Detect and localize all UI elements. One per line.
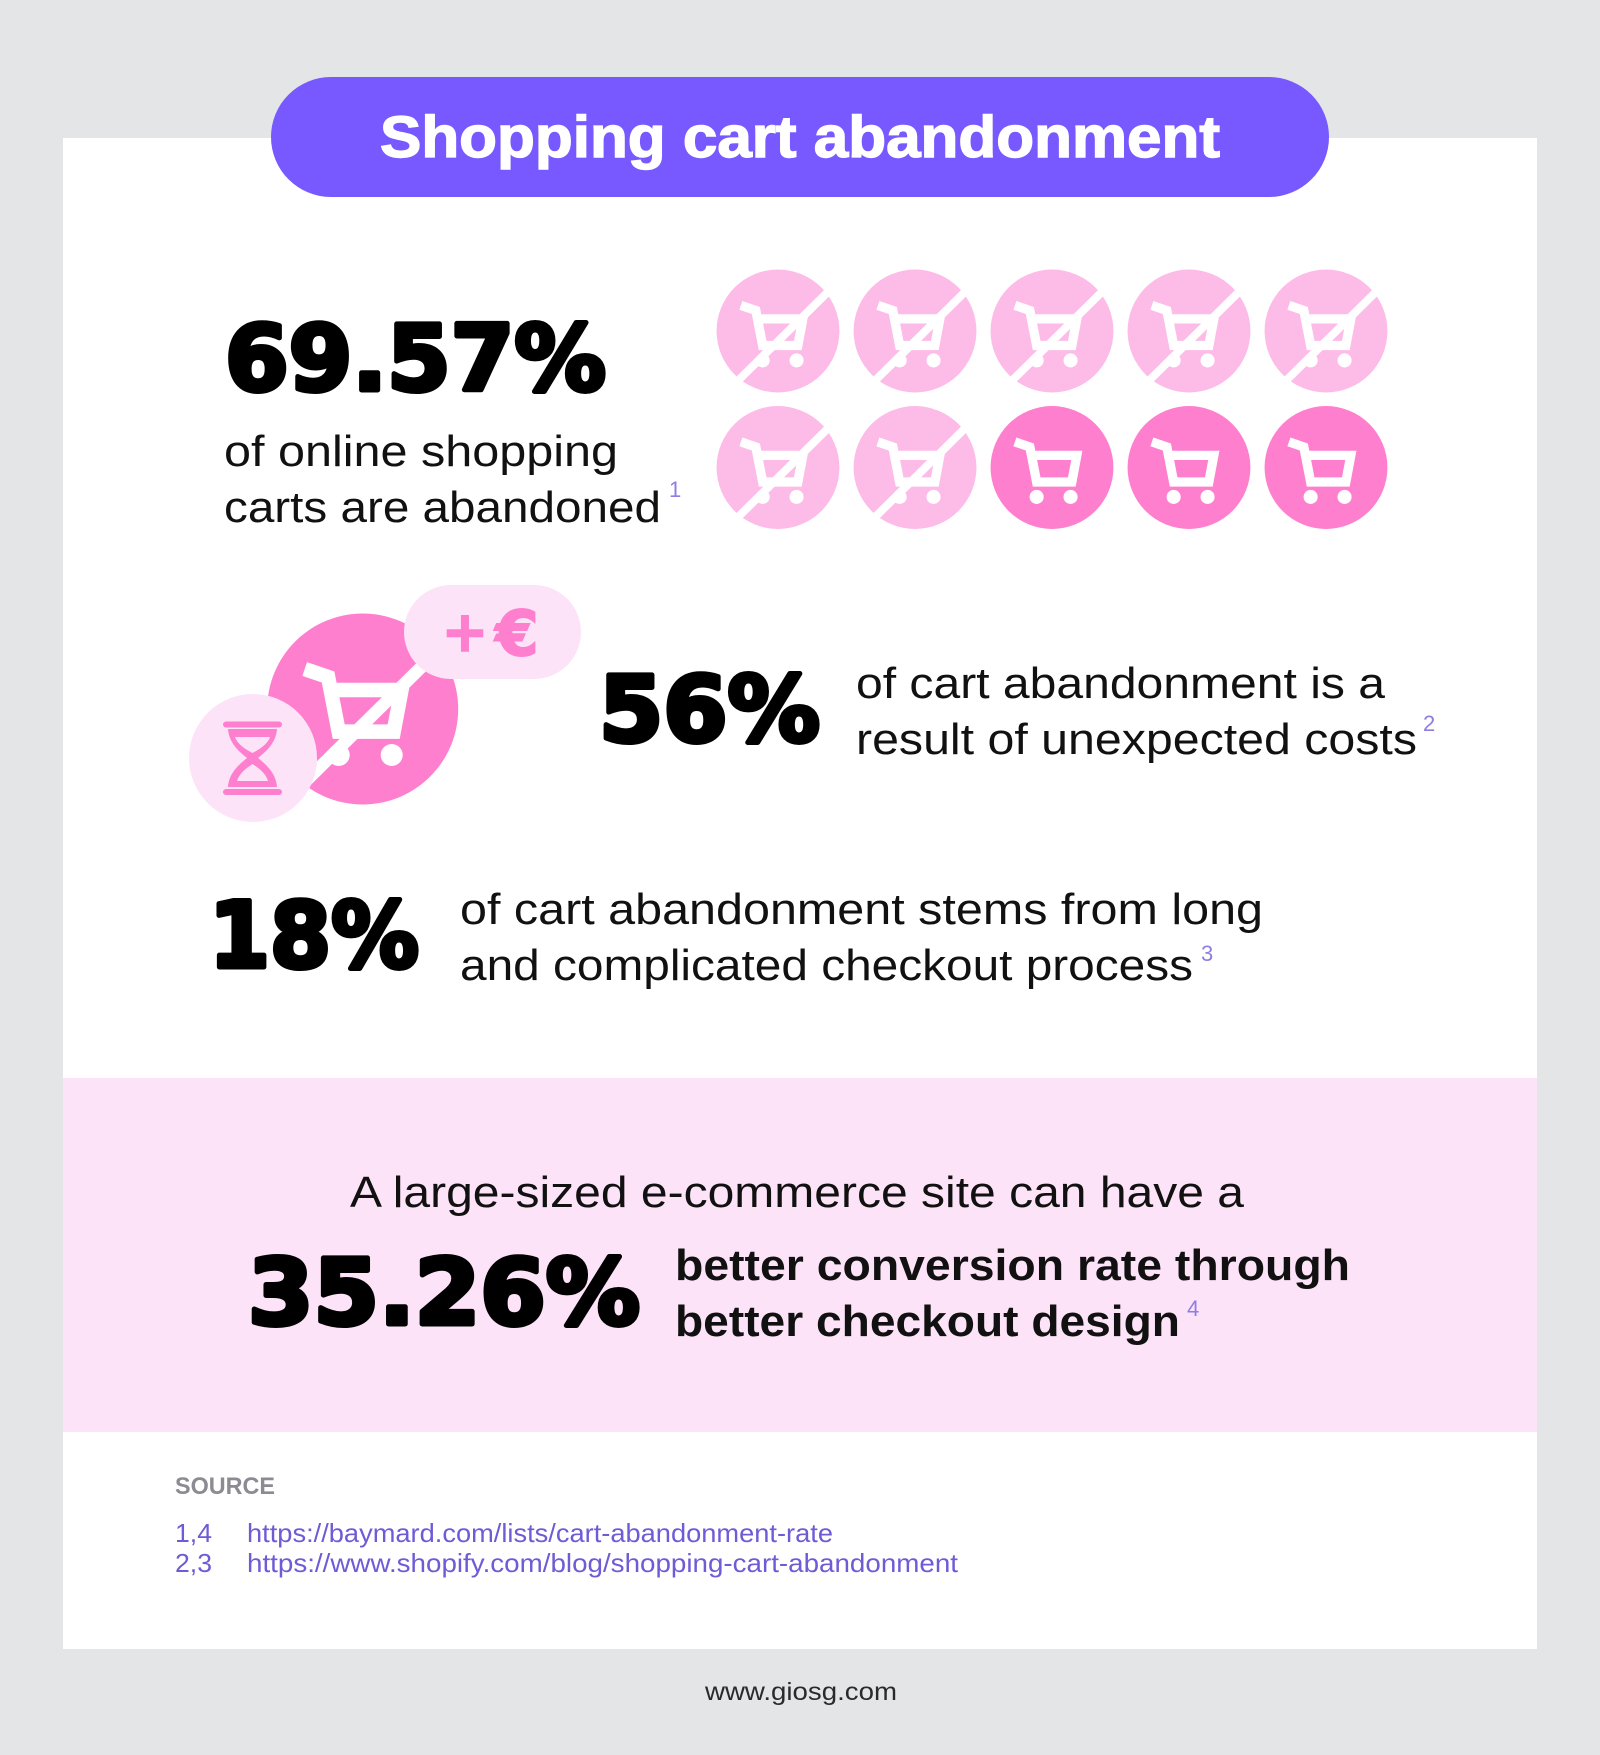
- panel: conversion highlight: better conversion rate through: [675, 1241, 1350, 1290]
- illustration: cart with extra cost and hourglass: +: [442, 600, 488, 665]
- illustration: cart with extra cost and hourglass: €: [493, 597, 539, 670]
- stat: 69.57%: carts are abandoned: [224, 483, 661, 532]
- stat: 56%: of cart abandonment is a: [856, 659, 1386, 708]
- stat: 18%: of cart abandonment stems from long: [460, 885, 1263, 934]
- stat: 69.57%: 1: [669, 477, 681, 502]
- panel: conversion highlight: 35.26%: [248, 1241, 640, 1346]
- panel: conversion highlight: 4: [1187, 1296, 1199, 1321]
- title pill: [271, 77, 1329, 197]
- stat: 56%: [599, 658, 1435, 764]
- title pill: Shopping cart abandonment: [380, 105, 1220, 170]
- stat: 56%: result of unexpected costs: [856, 715, 1417, 764]
- stat: 18%: 3: [1201, 941, 1213, 966]
- illustration: cart with extra cost and hourglass: [189, 585, 581, 822]
- panel: conversion highlight: better checkout design: [675, 1297, 1180, 1346]
- stat: 18%: and complicated checkout process: [460, 941, 1193, 990]
- stat: 18%: [209, 884, 1263, 990]
- sources: https://www.shopify.com/blog/shopping-cart-abandonment: [247, 1548, 959, 1578]
- panel: conversion highlight: [63, 1078, 1537, 1432]
- sources: 1,4: [175, 1518, 212, 1548]
- stat: 69.57%: of online shopping: [224, 427, 618, 476]
- icon grid: 7 of 10 carts abandoned: [717, 270, 1387, 529]
- stat: 18%: 18%: [209, 884, 419, 989]
- stat: 69.57%: 69.57%: [225, 307, 606, 412]
- stat: 56%: 56%: [599, 658, 820, 763]
- white card: [63, 138, 1537, 1649]
- sources: [175, 1473, 959, 1578]
- panel: conversion highlight: A large-sized e-commerce site can have a: [350, 1168, 1245, 1217]
- sources: https://baymard.com/lists/cart-abandonment-rate: [247, 1518, 833, 1548]
- sources: SOURCE: [175, 1473, 275, 1500]
- stat: 69.57%: [224, 307, 681, 532]
- stat: 56%: 2: [1423, 711, 1435, 736]
- footer url: www.giosg.com: [704, 1678, 897, 1706]
- sources: 2,3: [175, 1548, 212, 1578]
